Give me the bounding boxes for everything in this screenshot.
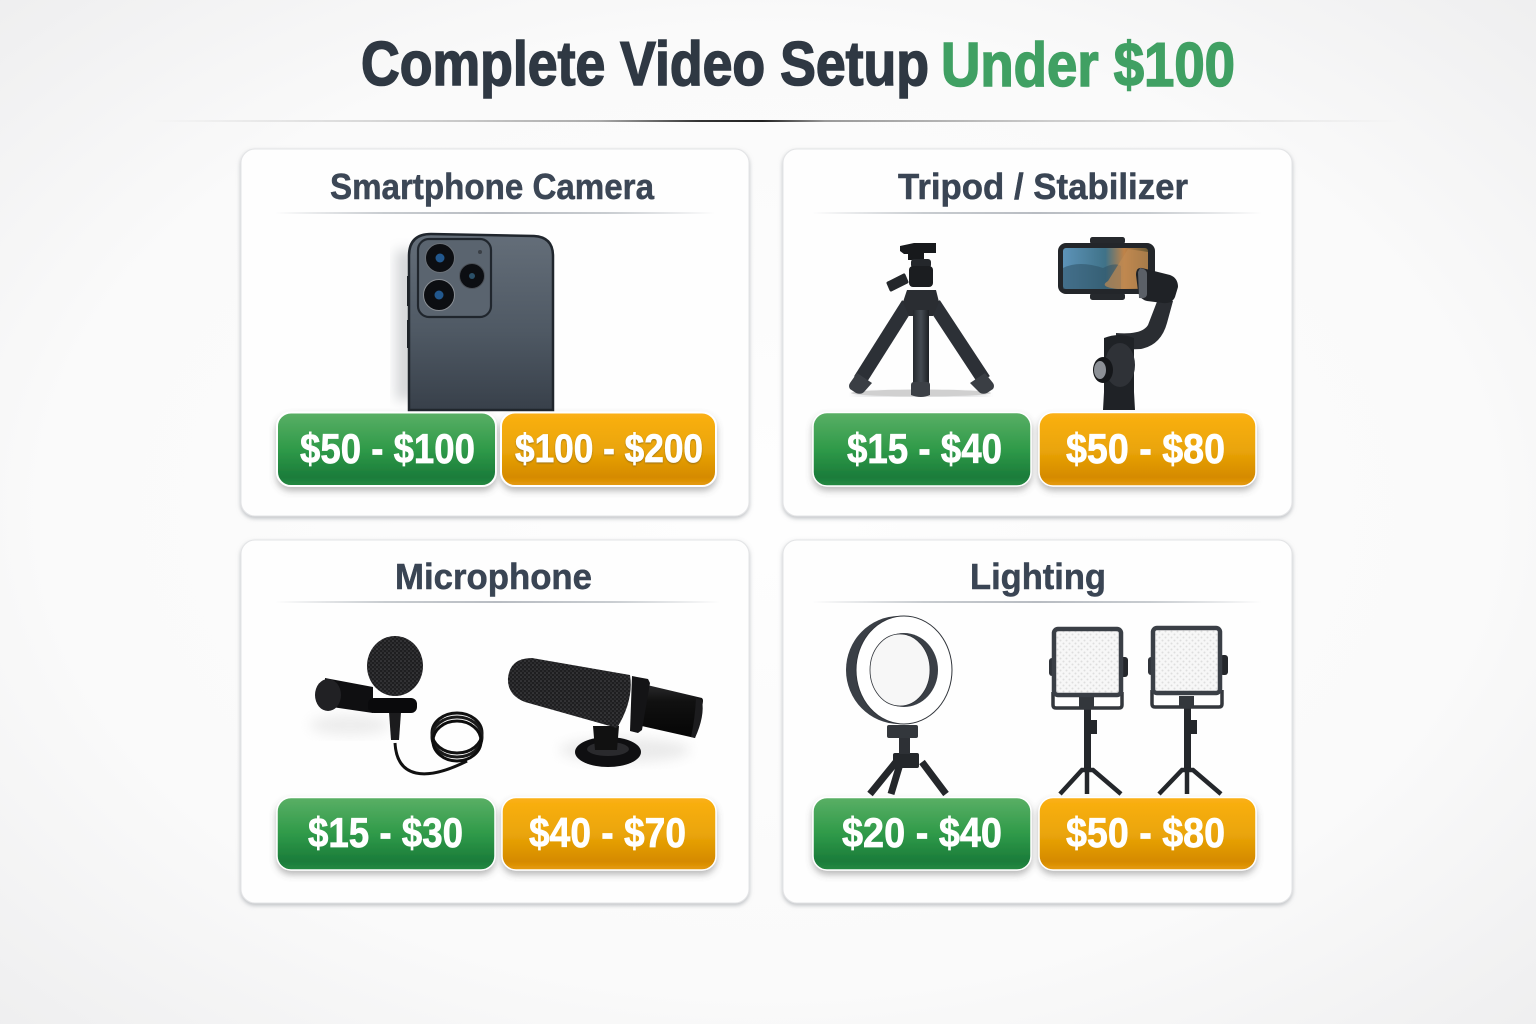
price: ring light: $20 - $40 (842, 809, 1002, 856)
icon: mini tripod (849, 243, 994, 397)
panel: smartphone camera (241, 149, 749, 516)
price: tripod (813, 412, 1031, 486)
price: shotgun microphone (502, 798, 716, 870)
panel: tripod / stabilizer (783, 149, 1292, 516)
icon: shotgun microphone (508, 658, 703, 767)
price: lavalier microphone (277, 798, 495, 870)
price: LED panels: $50 - $80 (1066, 809, 1225, 856)
price: premium smartphone: $100 - $200 (515, 427, 703, 471)
price: budget smartphone (277, 412, 496, 486)
icon: lavalier microphone (310, 636, 482, 774)
heading: lighting: Lighting (970, 556, 1106, 597)
icon: LED panel lights on stands (1049, 628, 1228, 794)
price: lavalier microphone: $15 - $30 (308, 809, 463, 856)
heading: microphone: Microphone (395, 556, 592, 597)
price: stabilizer: $50 - $80 (1066, 425, 1225, 472)
panel: microphone (241, 540, 749, 903)
title: Under $100 (941, 31, 1235, 100)
panel: lighting (783, 540, 1292, 903)
icon: ring light (846, 616, 952, 794)
title: Complete Video Setup (361, 30, 929, 99)
price: shotgun microphone: $40 - $70 (529, 809, 686, 856)
heading: tripod / stabilizer: Tripod / Stabilizer (898, 166, 1188, 207)
icon: smartphone back (396, 234, 553, 410)
light two (1148, 628, 1228, 794)
price: stabilizer (1039, 412, 1256, 486)
price: tripod: $15 - $40 (847, 425, 1002, 472)
price: ring light (813, 798, 1031, 870)
light one (1049, 629, 1128, 794)
price: premium smartphone (501, 412, 716, 486)
icon: smartphone gimbal (1058, 237, 1178, 410)
heading: smartphone camera: Smartphone Camera (330, 166, 655, 207)
price: budget smartphone: $50 - $100 (300, 425, 475, 472)
price: LED panels (1039, 798, 1256, 870)
